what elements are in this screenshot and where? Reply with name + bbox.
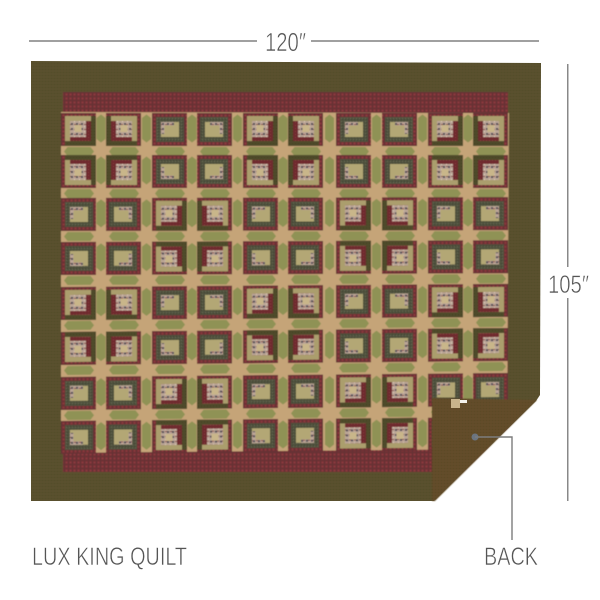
outer olive border <box>25 55 550 510</box>
quilt front <box>25 55 550 510</box>
label: back: BACK <box>484 543 538 571</box>
block row 4 <box>61 240 508 285</box>
block row 6 <box>61 328 508 375</box>
tan sashing background <box>61 112 509 453</box>
care tag <box>451 399 467 408</box>
red plaid inner border <box>63 92 508 472</box>
block row 8 <box>61 417 508 454</box>
block row 3 <box>61 197 508 241</box>
block row 2 <box>61 155 508 198</box>
block row 5 <box>61 284 508 330</box>
width label: 120″ <box>265 27 306 57</box>
folded back corner <box>432 398 537 501</box>
back callout leader <box>472 434 512 540</box>
block row 7 <box>61 373 508 420</box>
label: lux king quilt: LUX KING QUILT <box>32 543 187 571</box>
height label: 105″ <box>548 271 589 299</box>
block row 1 <box>61 113 508 156</box>
